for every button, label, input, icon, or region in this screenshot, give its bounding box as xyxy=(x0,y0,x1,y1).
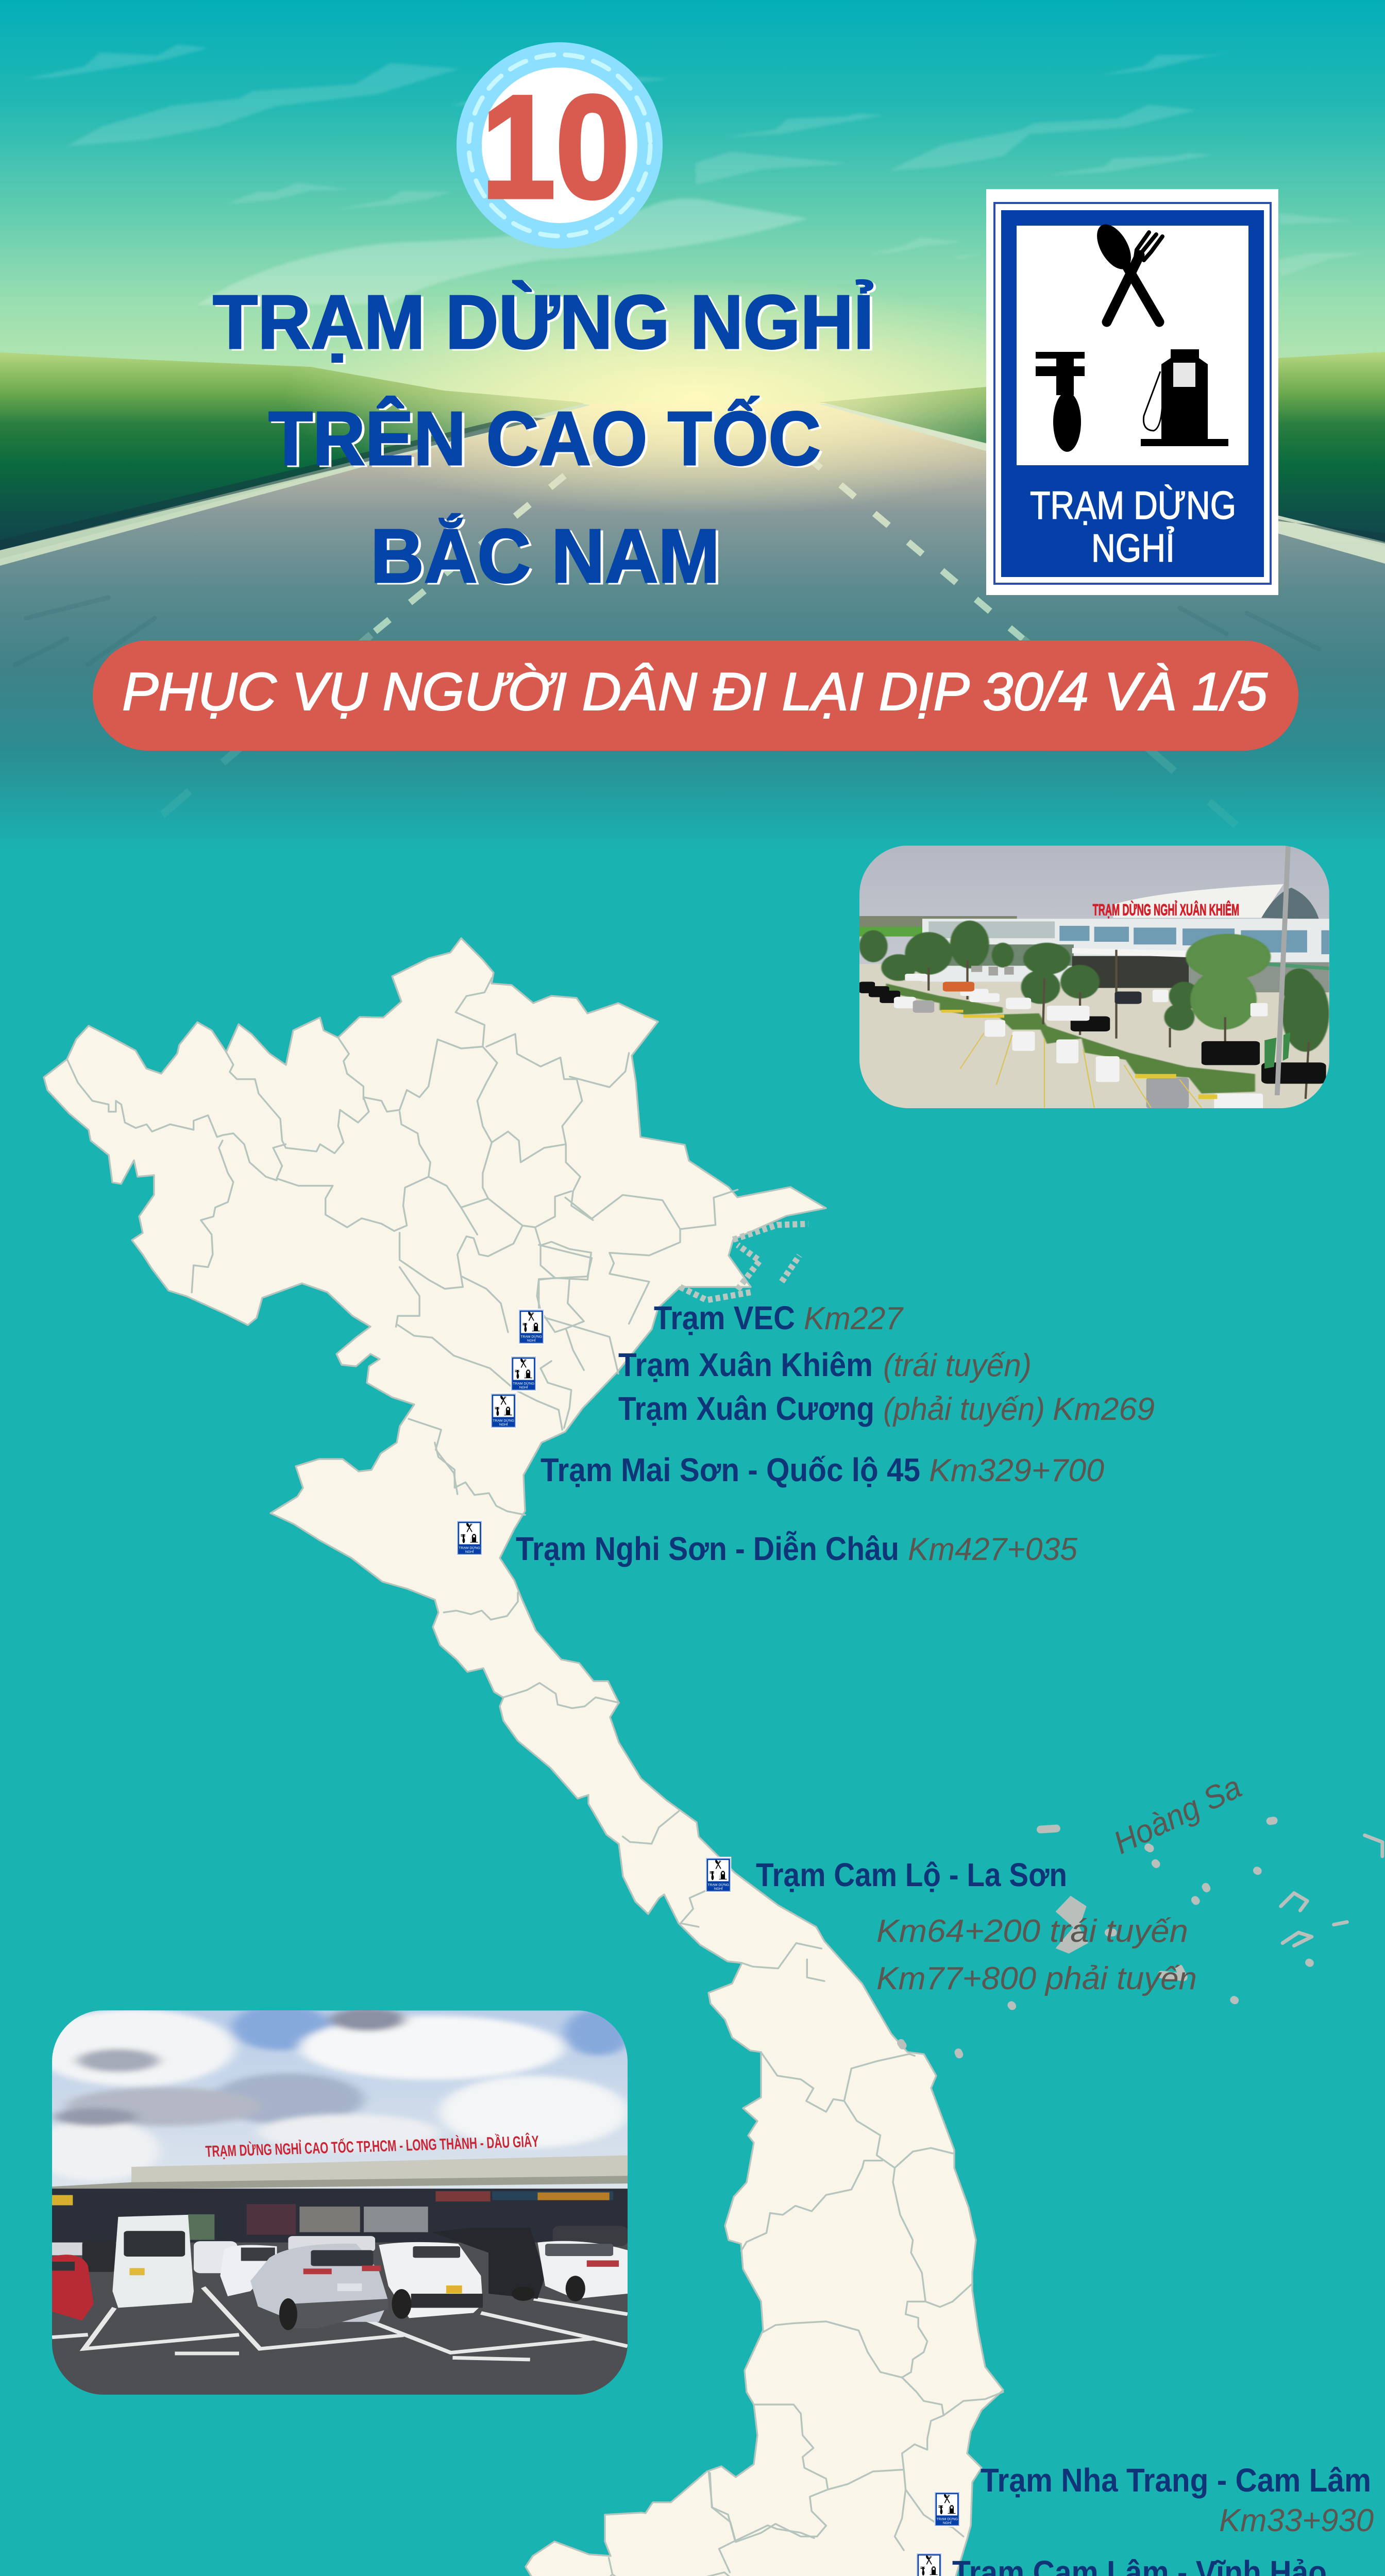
label: Tram Xuan Cuong xyxy=(618,1390,1155,1427)
label: Tram Xuan Khiem: (trái tuyến) xyxy=(883,1348,1032,1383)
sky xyxy=(0,0,1385,412)
provincial borders north-east xyxy=(539,1053,737,1374)
label: Tram Cam Lo: Km64+200 trái tuyến xyxy=(876,1913,1188,1949)
label: Tram Nghi Son: Trạm Nghi Sơn - Diễn Châu xyxy=(516,1530,899,1567)
title: TRẠM DỪNG NGHỈ xyxy=(213,280,874,365)
station icon: Tram VEC: NGHỈ xyxy=(527,1338,536,1343)
photo: Xuan Khiem rest stop xyxy=(859,845,1329,1109)
mainland xyxy=(44,938,1003,2576)
provincial borders south xyxy=(265,2473,814,2576)
label: Tram Cam Lo xyxy=(756,1856,1197,1996)
station icon: Tram Nghi Son: TRẠM DỪNG xyxy=(459,1546,480,1550)
label: Tram Xuan Khiem xyxy=(618,1346,1032,1383)
title: BẮC NAM xyxy=(370,514,720,599)
horizon glow xyxy=(283,278,1108,515)
station icon: Tram Xuan Khiem: TRẠM DỪNG xyxy=(513,1381,534,1386)
label: Tram Mai Son: Trạm Mai Sơn - Quốc lộ 45 xyxy=(541,1451,920,1488)
station icon: Tram Nha Trang: TRẠM DỪNG xyxy=(936,2517,958,2521)
station icon: Tram Cam Lo: TRẠM DỪNG xyxy=(707,1883,729,1887)
station icon: Tram Nha Trang: NGHỈ xyxy=(943,2520,952,2525)
station icon: Tram Xuan Cuong xyxy=(491,1393,516,1429)
station icon: Tram Xuan Khiem: NGHỈ xyxy=(519,1385,528,1389)
provincial borders north xyxy=(67,978,593,1494)
label: Tram Xuan Cuong: (phải tuyến) xyxy=(883,1392,1045,1427)
station icon: Tram Xuan Khiem xyxy=(511,1355,536,1392)
Hoang Sa islands xyxy=(901,1821,1382,2055)
label: Tram Nha Trang: Km33+930 xyxy=(1219,2503,1374,2538)
label: Hoang Sa: Hoàng Sa xyxy=(1108,1769,1247,1861)
road sign: rest stop xyxy=(986,189,1278,595)
label: Tram Mai Son: Km329+700 xyxy=(929,1453,1104,1488)
Ha Long bay islets xyxy=(680,1224,808,1300)
photo: TP HCM - Long Thanh - Dau Giay rest stop xyxy=(31,2004,632,2396)
station icon: Tram Nghi Son xyxy=(457,1520,482,1556)
station icon: Tram Cam Lo xyxy=(705,1857,731,1893)
hills xyxy=(0,352,598,562)
road edge lines xyxy=(0,404,590,566)
photo: TP HCM - Long Thanh - Dau Giay rest stop: TRẠM DỪNG NGHỈ CAO TỐC TP.HCM - LONG THÀNH - DẦU GIÂY xyxy=(205,2132,539,2161)
road sign: rest stop: TRẠM DỪNG xyxy=(1030,484,1236,528)
label: Tram Cam Lo: Trạm Cam Lộ - La Sơn xyxy=(756,1856,1067,1893)
lane dashes xyxy=(139,428,1247,835)
badge: number 10: 10 xyxy=(481,65,630,229)
station icon: Tram Cam Lam xyxy=(916,2552,942,2576)
station icon: Tram Nghi Son: NGHỈ xyxy=(465,1549,474,1554)
label: Tram VEC: Km227 xyxy=(804,1301,904,1336)
label: Tram Cam Lo: Km77+800 phải tuyến xyxy=(876,1961,1197,1996)
subtitle pill: PHỤC VỤ NGƯỜI DÂN ĐI LẠI DỊP 30/4 VÀ 1/5 xyxy=(122,662,1268,722)
label: Tram Xuan Cuong: Trạm Xuân Cương xyxy=(618,1390,874,1427)
station icon: Tram Xuan Cuong: TRẠM DỪNG xyxy=(493,1418,514,1423)
header scene: sky, hills and road xyxy=(0,0,1385,855)
label: Tram VEC: Trạm VEC xyxy=(654,1299,795,1336)
provincial borders central xyxy=(435,1443,824,1981)
road sign: rest stop: NGHỈ xyxy=(1091,527,1175,570)
station icon: Tram Cam Lo: NGHỈ xyxy=(714,1886,723,1891)
map of Vietnam xyxy=(44,938,1382,2576)
station icon: Tram VEC: TRẠM DỪNG xyxy=(520,1334,542,1339)
road streaks xyxy=(15,598,1319,665)
subtitle pill xyxy=(93,640,1298,751)
clouds xyxy=(24,44,1369,305)
label: Tram Nha Trang xyxy=(981,2462,1374,2538)
badge: number 10 xyxy=(457,42,663,248)
station icon: Tram VEC xyxy=(518,1309,544,1345)
title: TRÊN CAO TỐC xyxy=(268,396,821,481)
label: Tram Xuan Khiem: Trạm Xuân Khiêm xyxy=(618,1346,873,1383)
station icon: Tram Xuan Cuong: NGHỈ xyxy=(499,1422,508,1427)
label: Tram Nghi Son: Km427+035 xyxy=(908,1532,1077,1567)
road xyxy=(0,403,1385,855)
station icon: Tram Nha Trang xyxy=(934,2491,960,2527)
provincial borders south central xyxy=(708,2052,1003,2550)
title xyxy=(213,280,874,599)
label: Tram Xuan Cuong: Km269 xyxy=(1053,1392,1155,1427)
label: Tram VEC xyxy=(654,1299,904,1336)
